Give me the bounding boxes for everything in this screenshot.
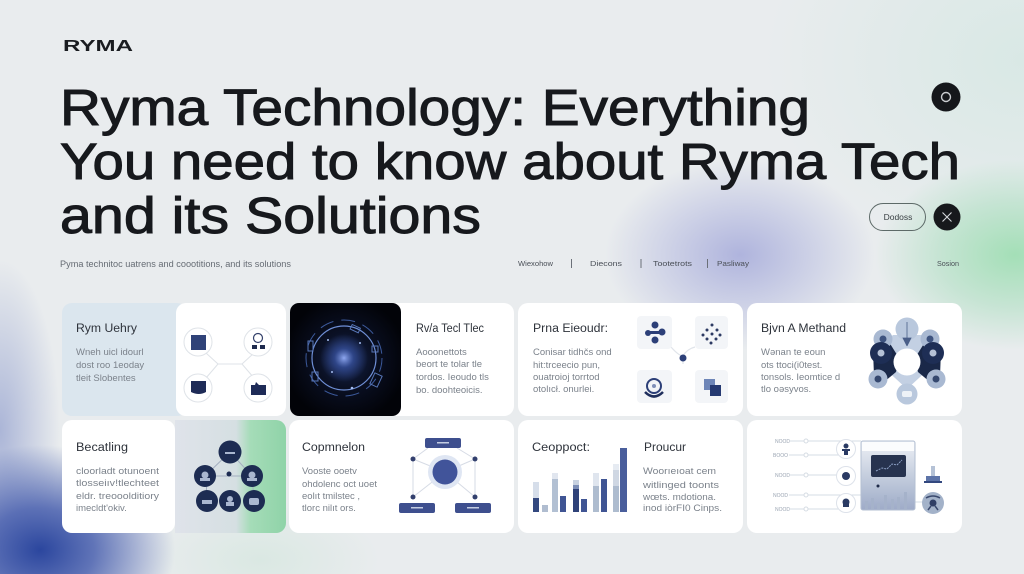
panel: Bjvn A Methand: ots ttoci(i0test. (761, 360, 822, 371)
panel: Rym Uehry text: tleit Slobentes (76, 373, 136, 384)
panel: Ceoppoct and Proucur: witlinged toonts (642, 480, 719, 491)
navigation: Diecons (590, 259, 622, 268)
pill button: Dodoss (884, 212, 912, 222)
small chart icon (924, 466, 942, 483)
panel: Rym Uehry text (62, 303, 187, 416)
panel: Becatling text: eldr. treooolditiory (76, 491, 159, 502)
panel: Prna Eieoudr: Conisar tidhčs ond (533, 347, 612, 358)
dashboard screen (861, 441, 915, 510)
panel: Copmnelon: Copmnelon (302, 442, 365, 454)
panel: Rva Tech (290, 303, 514, 416)
network diagram (399, 438, 491, 513)
panel: Becatling text: tlosseiıv!tlechteet (76, 478, 159, 489)
navigation: Pasliway (717, 259, 749, 268)
panel: Becatling text: cloorladt otunoent (76, 466, 159, 477)
panel: Copmnelon: ohdolenc oct uoet (302, 479, 377, 490)
image: dark tech ring (290, 303, 401, 416)
connector labels: NOOD (773, 493, 788, 499)
panel: Ceoppoct and Proucur: Ceoppoct: (532, 442, 590, 454)
bar chart (533, 448, 627, 512)
panel: Bjvn A Methand: tlo oəsyvos. (761, 384, 811, 395)
panel: Rva Tech: Rv/a Tecl Tlec (416, 323, 484, 335)
panel: Ceoppoct and Proucur: inod iòrFI0 Cinps. (643, 503, 722, 514)
panel: Prna Eieoudr: Prna Eieoudr: (533, 323, 608, 335)
panel: Bjvn A Methand: Wənan te eoun (761, 347, 825, 358)
panel: Rva Tech: tordos. Ieoudo tls (416, 372, 489, 383)
panel: Copmnelon (289, 420, 514, 533)
title (60, 79, 960, 244)
title: and its Solutions (60, 187, 481, 244)
panel: Ceoppoct and Proucur (518, 420, 743, 533)
subtitle: Pyma technitoc uatrens and coootitions, and its solutions (60, 259, 291, 269)
connector labels: NOOD (775, 507, 790, 513)
connector labels: BOOO (773, 453, 788, 459)
panel: Copmnelon: eolıt tmilstec , (302, 491, 360, 502)
connector lines (789, 439, 923, 511)
connector labels (773, 439, 790, 513)
icon: close button (934, 204, 960, 230)
connector labels: NOOD (775, 439, 790, 445)
panel: hub diagram (176, 303, 286, 416)
gauge icon (922, 492, 944, 514)
panel: green network diagram (175, 420, 286, 533)
panel: Ceoppoct and Proucur: Proucur (644, 442, 686, 454)
panel: Becatling text: Becatling (76, 442, 128, 454)
panel: Ceoppoct and Proucur: Woorıeıoat cem (643, 466, 716, 477)
panel: Copmnelon: tlorc nilıt ors. (302, 503, 356, 514)
panel: Rva Tech: beort te tolar tle (416, 359, 482, 370)
title: Ryma Technology: Everything (60, 79, 810, 136)
panel: Prna Eieoudr: ouatroioj torrtod (533, 372, 600, 383)
panel: Rym Uehry text: Wneh uicl idourl (76, 347, 144, 358)
radial diagram (868, 318, 946, 404)
connector labels: NOOD (775, 473, 790, 479)
panel: Prna Eieoudr: otolıcł. onurlei. (533, 384, 594, 395)
navigation: Tootetrots (653, 259, 692, 268)
panel: dashboard (747, 420, 962, 533)
panel: Copmnelon: Vooste ooetv (302, 466, 357, 477)
panel: Prna Eieoudr: hit:trceecio pun, (533, 360, 600, 371)
panel: Rym Uehry text: dost roo 1eoday (76, 360, 144, 371)
panel: Bjvn A Methand: tonsols. Ieomtice d (761, 372, 840, 383)
panel: Becatling text: imecldt'okiv. (76, 503, 127, 514)
navigation (518, 259, 959, 268)
icon: top round button (932, 82, 960, 112)
round icons (836, 440, 856, 512)
navigation: Wiexohow (518, 259, 554, 268)
panel: Ceoppoct and Proucur: wœts. mdotiona. (642, 492, 716, 503)
icon grid (637, 316, 728, 403)
navigation: Sosion (937, 259, 959, 268)
panel: Prna Eieoudr (518, 303, 743, 416)
pill button (870, 204, 926, 230)
panel: Bjvn A Methand (747, 303, 962, 416)
logo: RYMA (63, 38, 134, 55)
panel: Rva Tech: bo. doohteoicis. (416, 385, 483, 396)
panel: Bjvn A Methand: Bjvn A Methand (761, 323, 846, 335)
panel: Rym Uehry text: Rym Uehry (76, 323, 137, 335)
title: You need to know about Ryma Tech (60, 133, 960, 190)
panel: Becatling text (62, 420, 175, 533)
panel: Rva Tech: Aooonettots (416, 347, 467, 358)
